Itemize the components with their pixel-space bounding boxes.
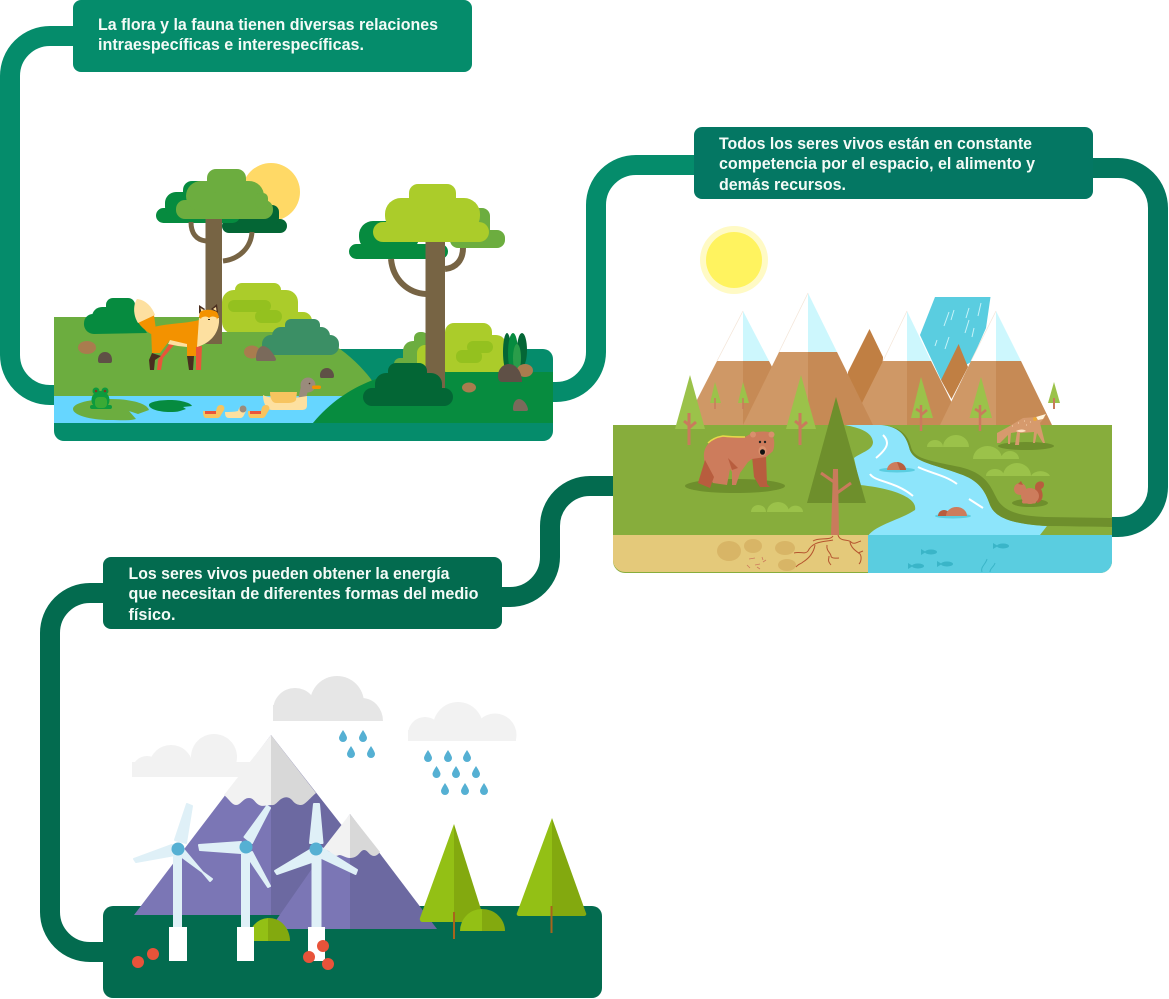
bear: belly shade (728, 458, 738, 470)
ground (613, 425, 1112, 573)
duck (263, 378, 321, 410)
rocks (78, 341, 528, 411)
squirrel (1012, 481, 1048, 507)
panel: forest scene (54, 163, 553, 441)
tree: right pine (517, 818, 586, 933)
mountain: right middle (851, 311, 963, 425)
trunk: right tree (426, 242, 445, 392)
frog (90, 388, 112, 409)
fox: tail (138, 315, 156, 334)
mountain: small (270, 814, 437, 929)
bushes (751, 435, 1050, 512)
rain drops (339, 730, 488, 795)
bush: left (84, 298, 147, 334)
fox: front legs (187, 356, 194, 370)
label 1: La flora y la fauna tienen diversas relaciones (98, 16, 438, 34)
river (845, 425, 1047, 536)
wind turbine 3 (275, 804, 357, 961)
label 1 (73, 0, 472, 72)
connector: forest scene to label 2 (550, 165, 696, 392)
bush: dark foreground (363, 363, 453, 406)
trunk: left tree (206, 219, 222, 344)
ducklings (203, 405, 269, 418)
label 3: que necesitan de diferentes formas del medio (128, 585, 478, 603)
fox (134, 299, 219, 370)
label 3: físico. (128, 606, 176, 624)
bear: far front leg (752, 456, 770, 487)
big pine trunk with roots (747, 469, 863, 569)
pine trees (675, 375, 1060, 445)
panel: mountain scene (613, 226, 1112, 573)
grass: right hill (313, 372, 553, 423)
panel: energy scene (103, 676, 602, 998)
connector: label 3 to energy scene (50, 593, 105, 952)
mountain: right (940, 311, 1052, 425)
fox: body (151, 320, 199, 356)
water (54, 396, 345, 423)
bush: centre (248, 918, 290, 941)
fox: ears (199, 304, 218, 315)
waterfall (920, 297, 990, 380)
river rocks (879, 462, 971, 518)
river streaks (870, 435, 983, 508)
label 2 (694, 127, 1093, 199)
icon: sun (242, 163, 300, 221)
sea water (868, 535, 1112, 573)
wind turbine 2 (199, 806, 270, 961)
plants (498, 333, 533, 382)
cloud: upper (273, 676, 383, 721)
mountain: centre (743, 293, 873, 425)
icon: sun (700, 226, 768, 294)
cloud: left (132, 734, 250, 777)
lily pads (73, 399, 192, 420)
cloud: right (408, 702, 516, 741)
red berries (132, 940, 334, 970)
panel base (54, 349, 553, 441)
wind turbine 1 (134, 804, 212, 961)
panel base (103, 906, 602, 998)
bush: behind fox (222, 283, 312, 334)
sand stones (717, 539, 796, 571)
grass: left meadow (54, 317, 390, 400)
connector: label 1 to forest scene (10, 36, 74, 395)
fox: hind legs (149, 353, 161, 370)
mountain: back peak (848, 329, 883, 425)
connector: label 2 to mountain scene (1090, 168, 1158, 527)
bear: hind leg (698, 460, 714, 488)
label 3: Los seres vivos pueden obtener la energía (128, 565, 450, 583)
fish (908, 543, 1009, 569)
big pine (807, 397, 866, 503)
mountain: large (134, 735, 412, 915)
label 1: intraespecíficas e interespecíficas. (98, 36, 364, 54)
label 3 (103, 557, 502, 629)
fox: chest (197, 318, 219, 347)
mountain: left (684, 311, 802, 425)
label 2: Todos los seres vivos están en constante (719, 135, 1032, 153)
bear (685, 432, 785, 493)
mountain: small brown peak (941, 344, 968, 399)
bush: right back (394, 323, 506, 373)
tree: left pine (420, 824, 485, 939)
tree: left canopy (156, 169, 287, 233)
bush: teal (262, 319, 339, 355)
tree: right branches (391, 248, 463, 294)
deer (997, 414, 1054, 450)
label 2: competencia por el espacio, el alimento y (719, 155, 1036, 173)
tree: right canopy (349, 184, 505, 259)
connector: mountain scene to label 3 (500, 486, 615, 597)
bear: body (704, 432, 774, 485)
tree: left branches (191, 222, 252, 261)
river bank (880, 425, 1112, 527)
bush: right (460, 909, 505, 931)
seaweed (982, 559, 995, 572)
label 2: demás recursos. (719, 176, 846, 194)
fox: face (199, 310, 219, 321)
grass corner (1040, 526, 1112, 535)
sand (613, 535, 868, 572)
